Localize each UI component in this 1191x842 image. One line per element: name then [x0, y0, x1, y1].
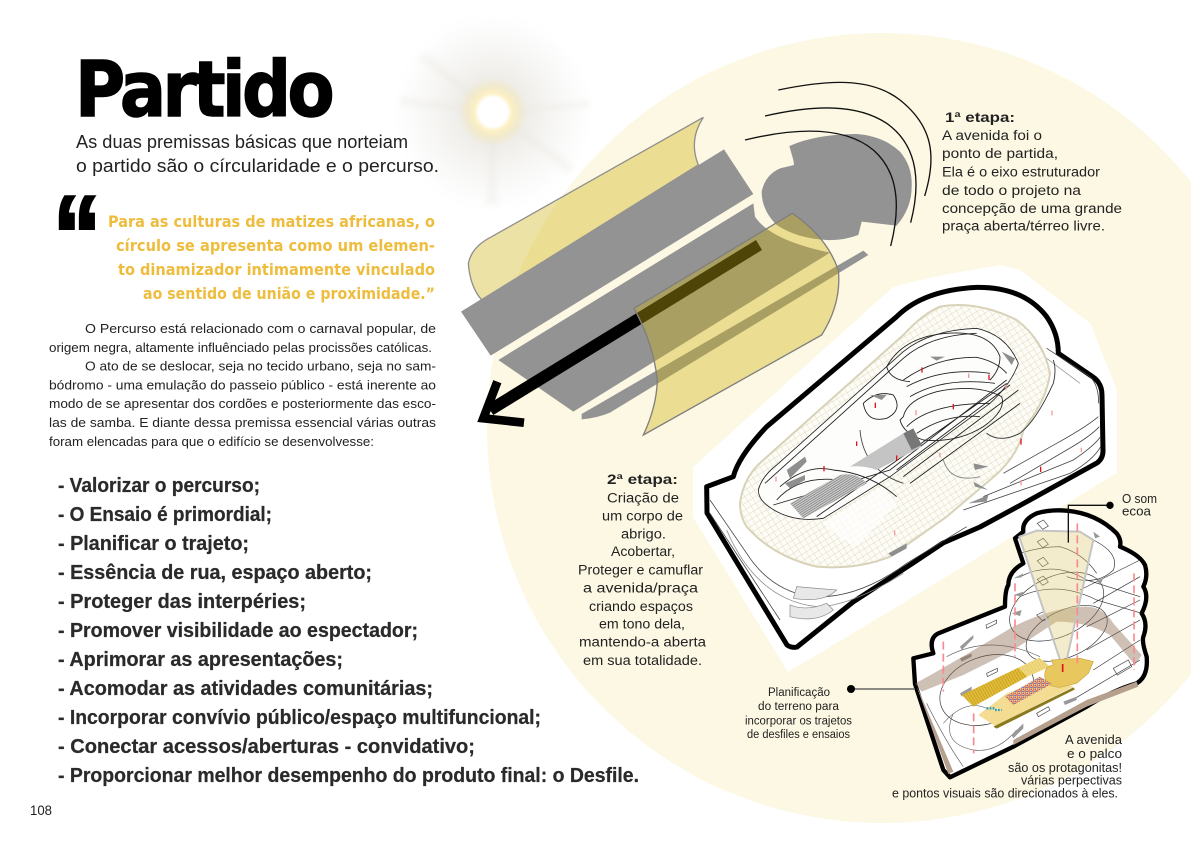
black arcs: [745, 82, 931, 246]
grey seating: [790, 474, 867, 518]
list of guidelines: - Proporcionar melhor desempenho do produto final: o Desfile.: [58, 764, 639, 787]
icon: sun glow: [393, 12, 593, 212]
red markers: [776, 367, 1081, 535]
text: first stage: concepção de uma grande: [942, 201, 1122, 216]
stepped contours: [765, 333, 1055, 517]
text: first stage: praça aberta/térreo livre.: [942, 218, 1105, 234]
back yellow canopy: [468, 117, 703, 300]
text: second stage: [578, 472, 707, 668]
text: sound note: O som: [1122, 492, 1157, 506]
text: second stage: Acobertar,: [611, 544, 675, 559]
pull quote: ao sentido de união e proximidade.”: [143, 284, 435, 303]
list of guidelines: - Valorizar o percurso;: [58, 474, 260, 497]
inner open court: [758, 328, 1018, 519]
text: terrain note: Planificação: [768, 687, 830, 699]
page number: 108: [30, 802, 52, 818]
list of guidelines: - Conectar acessos/aberturas - convidativo;: [58, 735, 475, 758]
text: terrain note: de desfiles e ensaios: [747, 729, 850, 741]
open patch in canopy: [823, 487, 897, 547]
mesh canopy: [740, 305, 1050, 567]
icon: opening quote mark: “: [53, 173, 101, 298]
grey avenue blocks: [461, 134, 912, 419]
text: second stage: criando espaços: [589, 599, 693, 614]
callout leader: sound: [1068, 502, 1114, 543]
text: second stage: abrigo.: [621, 526, 666, 542]
body paragraph: [49, 322, 436, 449]
title: Partido: [75, 46, 332, 135]
list of guidelines: - Aprimorar as apresentações;: [58, 648, 343, 671]
text: stage note: são os protagonitas!: [1008, 761, 1122, 775]
round stage: [1045, 658, 1093, 687]
dashed columns: [943, 523, 1134, 753]
list of guidelines: - O Ensaio é primordial;: [58, 503, 272, 526]
pull quote: Para as culturas de matizes africanas, o: [108, 212, 435, 231]
text: first stage: 1ª etapa:: [945, 110, 1015, 125]
text: stage note: várias perpectivas: [1021, 774, 1122, 788]
floor rails: [710, 348, 1101, 620]
list of guidelines: - Acomodar as atividades comunitárias;: [58, 677, 433, 700]
text: second stage: 2ª etapa:: [607, 472, 678, 487]
text: second stage: em sua totalidade.: [583, 653, 702, 668]
grey stairs and details: [785, 352, 1015, 557]
list of guidelines: - Promover visibilidade ao espectador;: [58, 619, 418, 642]
building outline: [707, 287, 1103, 647]
pull quote: to dinamizador intimamente vinculado: [118, 260, 435, 279]
stage floor: [978, 678, 1073, 726]
text: terrain note: [745, 687, 852, 741]
body paragraph: O ato de se deslocar, seja no tecido urbano, seja no sam-: [85, 360, 436, 374]
crowd: [1005, 677, 1052, 705]
text: terrain note: incorporar os trajetos: [745, 716, 852, 728]
building outline: [913, 510, 1147, 777]
echo cone: [1019, 531, 1093, 660]
floor plan lines: [927, 540, 1142, 767]
pull quote: círculo se apresenta como um elemen-: [116, 236, 435, 255]
body paragraph: O Percurso está relacionado com o carnaval popular, de: [85, 322, 436, 336]
body paragraph: modo de se apresentar dos cordões e posteriormente das esco-: [49, 397, 436, 411]
subtitle: o partido são o círcularidade e o percurso.: [76, 155, 439, 176]
text: second stage: mantendo-a aberta: [579, 634, 707, 650]
list of guidelines: - Incorporar convívio público/espaço multifuncional;: [58, 706, 541, 729]
text: sound note: [1122, 492, 1157, 518]
list of guidelines: [58, 474, 639, 787]
text: second stage: a avenida/praça: [583, 580, 699, 596]
text: stage note: e pontos visuais são direcionados à eles.: [892, 786, 1118, 800]
body paragraph: origem negra, altamente influênciado pelas procissões católicas.: [49, 341, 432, 355]
body paragraph: bódromo - uma emulação do passeio público - está inerente ao: [49, 378, 436, 392]
text: terrain note: do terreno para: [758, 701, 840, 713]
text: first stage: de todo o projeto na: [942, 183, 1082, 198]
list of guidelines: - Planificar o trajeto;: [58, 532, 249, 555]
text: first stage: Ela é o eixo estruturador: [942, 164, 1101, 180]
subtitle: [76, 131, 439, 176]
brown route band: [915, 607, 1142, 692]
background circle: [487, 33, 1191, 823]
text: second stage: em tono dela,: [599, 616, 685, 632]
text: first stage: ponto de partida,: [942, 146, 1058, 161]
diagram: first stage avenue: [461, 82, 931, 435]
text: first stage: A avenida foi o: [942, 128, 1042, 143]
text: stage note: e o palco: [1067, 747, 1122, 761]
front yellow canopy: [634, 213, 839, 435]
diagram: second stage building with canopy: [707, 287, 1103, 647]
body paragraph: foram elencadas para que o edifício se desenvolvesse:: [49, 435, 374, 449]
text: stage note: A avenida: [1065, 733, 1122, 747]
text: sound note: ecoa: [1122, 504, 1151, 518]
arrow: route direction: [483, 240, 762, 423]
list of guidelines: - Essência de rua, espaço aberto;: [58, 561, 372, 584]
pull quote: [108, 212, 435, 303]
text: stage note: [892, 733, 1122, 800]
diagram: third stage section with stage: [913, 502, 1147, 777]
callout leader: terrain: [847, 685, 915, 693]
white halo behind buildings: [693, 265, 1117, 672]
text: second stage: um corpo de: [602, 508, 683, 524]
brown terrain edge: [917, 682, 1138, 774]
list of guidelines: - Proteger das interpéries;: [58, 590, 306, 613]
text: first stage: [942, 110, 1122, 234]
text: second stage: Proteger e camuflar: [578, 562, 704, 578]
body paragraph: las de samba. E diante dessa premissa essencial várias outras: [49, 416, 436, 430]
plan icons: [986, 520, 1132, 717]
text: second stage: Criação de: [607, 490, 679, 506]
subtitle: As duas premissas básicas que norteiam: [76, 131, 408, 152]
